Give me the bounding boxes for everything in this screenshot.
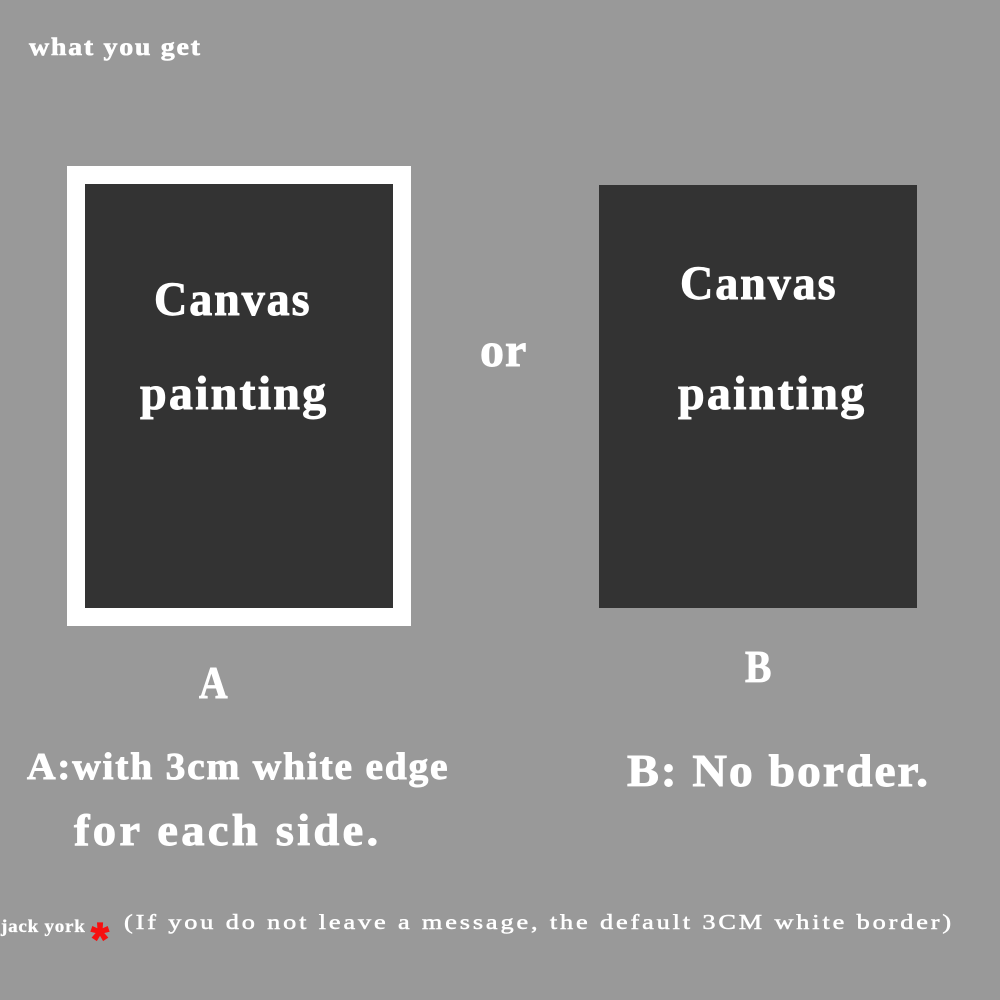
icon: red asterisk: * — [91, 913, 109, 965]
caption B: B: No border. — [627, 745, 930, 796]
panel A text: Canvas: Canvas — [154, 273, 311, 326]
panel B text: Canvas: Canvas — [680, 257, 837, 310]
panel A: canvas with white edge — [67, 166, 411, 626]
signature: jack york: jack york — [1, 916, 86, 936]
or label: or — [480, 324, 527, 377]
label B: B — [745, 641, 771, 692]
panel A text: painting: painting — [140, 367, 328, 420]
panel B: canvas with no border — [599, 185, 917, 608]
label A: A — [199, 657, 228, 708]
caption A line 1: A:with 3cm white edge — [27, 746, 449, 788]
heading: what you get: what you get — [29, 34, 202, 61]
caption A line 2: for each side. — [74, 806, 381, 855]
panel B text: painting: painting — [678, 367, 866, 420]
note: default border: (If you do not leave a message, the default 3CM white border) — [124, 910, 954, 934]
